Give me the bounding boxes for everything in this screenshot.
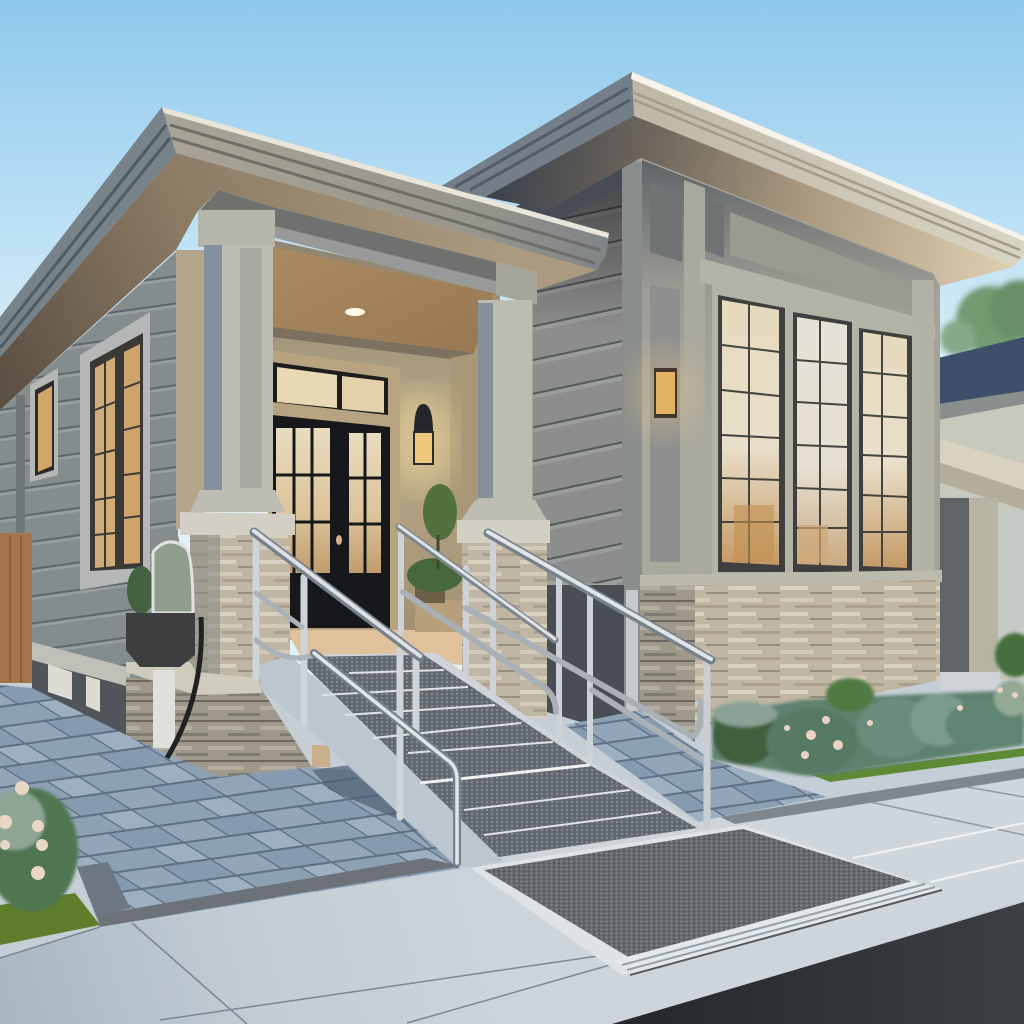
patio pavers <box>0 685 460 927</box>
left stone pier <box>126 535 330 777</box>
ramp shadow <box>312 765 440 855</box>
left block wall <box>0 250 210 735</box>
right pavers <box>565 710 827 825</box>
ramp side panel <box>258 655 505 868</box>
patio border <box>77 858 460 927</box>
background tree <box>940 280 1024 356</box>
wall lantern right <box>631 348 699 436</box>
porch beam <box>273 207 496 294</box>
lawn corner <box>0 893 100 945</box>
left roof <box>0 107 609 410</box>
large windows <box>640 285 942 586</box>
left ramp railing <box>254 531 457 863</box>
porch lantern <box>414 404 433 464</box>
mailbox planter <box>126 542 201 758</box>
right roof <box>440 72 1024 286</box>
front door with transom <box>268 350 400 630</box>
porch plants <box>407 484 463 632</box>
wooden fence <box>0 533 32 683</box>
right porch column <box>457 262 550 718</box>
lawn strip <box>812 748 1024 782</box>
asphalt road <box>612 902 1024 1024</box>
right ramp railing <box>399 526 711 825</box>
dark wall under ramp <box>547 585 624 735</box>
left porch column <box>180 190 295 535</box>
right walkway <box>480 768 1024 993</box>
front sidewalk <box>0 868 1024 1024</box>
porch interior <box>272 240 500 665</box>
left windows <box>30 312 150 590</box>
ramp deck <box>296 653 709 862</box>
ground base <box>0 675 1024 1024</box>
neighbouring house <box>938 337 1024 690</box>
stone base right <box>640 580 940 742</box>
entry mat <box>470 825 942 975</box>
sky <box>0 0 1024 720</box>
right block wall <box>500 150 940 742</box>
flower bed right <box>712 633 1024 776</box>
rose bush <box>0 781 78 912</box>
